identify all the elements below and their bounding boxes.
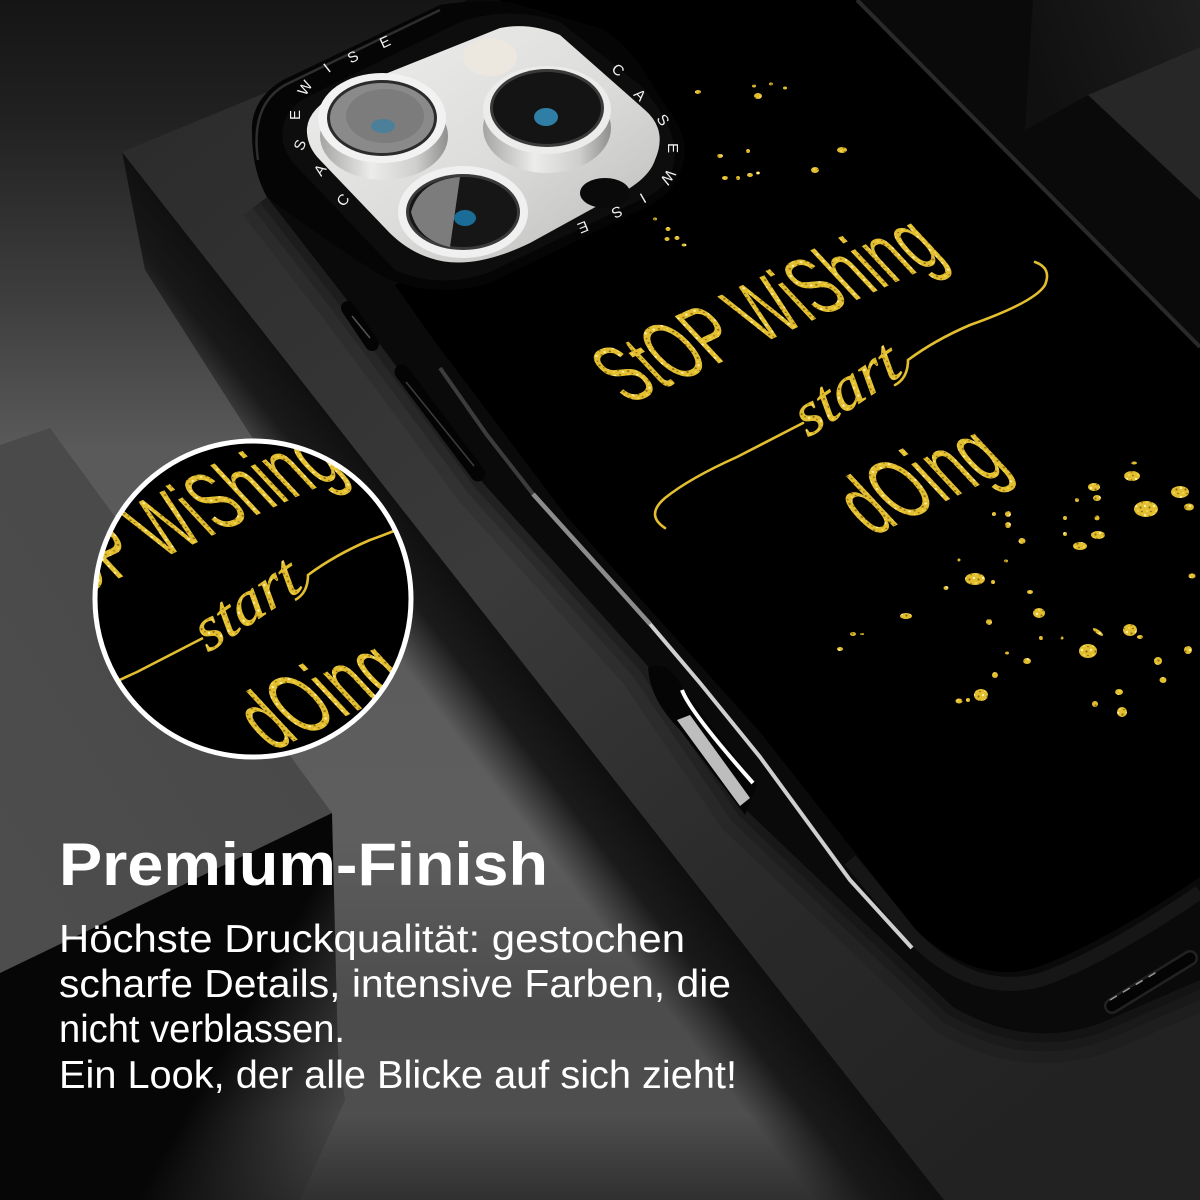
upper-right block top: [1088, 47, 1200, 200]
upper-right facet: [1025, 0, 1200, 130]
CASEWISE ring text: I: [637, 189, 649, 206]
gold splatter dots: [653, 82, 1196, 717]
CASEWISE ring text: W: [656, 166, 679, 188]
inner window: [307, 26, 660, 263]
CASEWISE ring text: S: [609, 202, 625, 221]
CASEWISE ring text: S: [291, 137, 310, 153]
gold lettering on case: [570, 196, 1047, 552]
microphone hole: [580, 178, 630, 208]
contact shadow: [267, 197, 1200, 1033]
ring band: [282, 14, 675, 281]
CASEWISE ring text: E: [377, 33, 393, 52]
central block side face: [122, 152, 944, 1200]
CASEWISE ring text: S: [653, 111, 672, 129]
heading: Premium-Finish: [59, 831, 548, 898]
magnified detail circle: [92, 438, 414, 760]
circle border: [95, 441, 411, 757]
CASEWISE ring text: [287, 33, 681, 236]
body text: scharfe Details, intensive Farben, die: [59, 963, 731, 1006]
left block top face: [0, 428, 332, 973]
magnified lettering: dOing: [213, 621, 427, 767]
text: Stop Wishing: StOP WiShing: [570, 196, 962, 420]
phone back panel: [395, 0, 1200, 972]
lens 3: [398, 166, 528, 258]
edge highlight middle: [533, 494, 650, 624]
volume button: [402, 372, 478, 474]
CASEWISE ring text: E: [287, 110, 304, 120]
CASEWISE ring text: A: [311, 161, 330, 179]
CASEWISE ring text: C: [608, 60, 627, 80]
CASEWISE ring text: E: [575, 217, 591, 236]
text: start: start: [781, 325, 913, 450]
camera control button: [648, 666, 757, 815]
flash: [463, 38, 517, 76]
lens 2: [483, 66, 611, 173]
text: doing: dOing: [813, 406, 1027, 552]
upper-right backdrop: [857, 0, 1200, 347]
camera island: [252, 1, 685, 290]
edge highlight upper: [440, 368, 533, 494]
body text: Ein Look, der alle Blicke auf sich zieht!: [59, 1054, 737, 1097]
CASEWISE ring text: C: [333, 191, 353, 210]
bottom rim band: [850, 860, 1200, 984]
phone case: [252, 0, 1200, 1033]
island rim: [252, 1, 685, 290]
magnified lettering: start: [181, 540, 313, 665]
CASEWISE ring text: S: [345, 48, 362, 67]
body text: nicht verblassen.: [59, 1008, 345, 1051]
flourish line: [655, 262, 1047, 528]
CASEWISE ring text: W: [294, 77, 317, 99]
edge highlight lower: [650, 624, 912, 948]
CASEWISE ring text: A: [630, 86, 649, 105]
magnified lettering: [98, 449, 394, 748]
side button small: [348, 308, 372, 344]
body text: [59, 918, 737, 1097]
rim gloss: [257, 10, 440, 160]
bottom port: [1110, 958, 1190, 1006]
CASEWISE ring text: I: [320, 60, 334, 76]
CASEWISE ring text: E: [664, 143, 681, 153]
lens 1: [318, 73, 448, 180]
right edge line: [857, 0, 1200, 347]
case shell: [252, 0, 1200, 1033]
body text: Höchste Druckqualität: gestochen: [59, 918, 685, 961]
left block front face: [0, 813, 345, 1200]
